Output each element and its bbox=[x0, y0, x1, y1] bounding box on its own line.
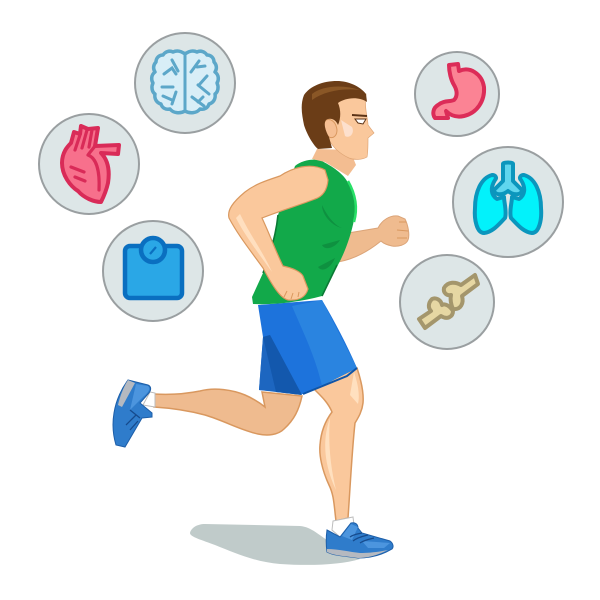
rear shoe bbox=[113, 380, 152, 447]
shorts bbox=[258, 300, 357, 395]
front shoe bbox=[326, 523, 393, 558]
front sock bbox=[332, 517, 354, 537]
cheek highlight bbox=[341, 120, 353, 137]
front leg bbox=[313, 368, 363, 521]
face bbox=[328, 94, 374, 159]
near arm bbox=[229, 166, 328, 300]
runner figure bbox=[113, 81, 409, 558]
neck bbox=[312, 149, 356, 176]
green tank top bbox=[252, 160, 356, 304]
icon: stomach bbox=[415, 52, 499, 136]
icon: heart bbox=[39, 114, 139, 214]
icon: weight scale bbox=[103, 221, 203, 321]
icon: lungs bbox=[453, 147, 563, 257]
icon: knee joint bbox=[400, 255, 494, 349]
ground shadow bbox=[190, 524, 360, 565]
rear sock bbox=[143, 392, 155, 407]
icon: brain bbox=[135, 33, 235, 133]
eye and brow bbox=[352, 115, 367, 116]
far arm bbox=[338, 216, 409, 262]
rear leg bbox=[154, 389, 302, 435]
knuckles bbox=[284, 222, 408, 299]
eye bbox=[355, 119, 366, 124]
ear bbox=[324, 119, 337, 138]
hair bbox=[302, 81, 367, 149]
